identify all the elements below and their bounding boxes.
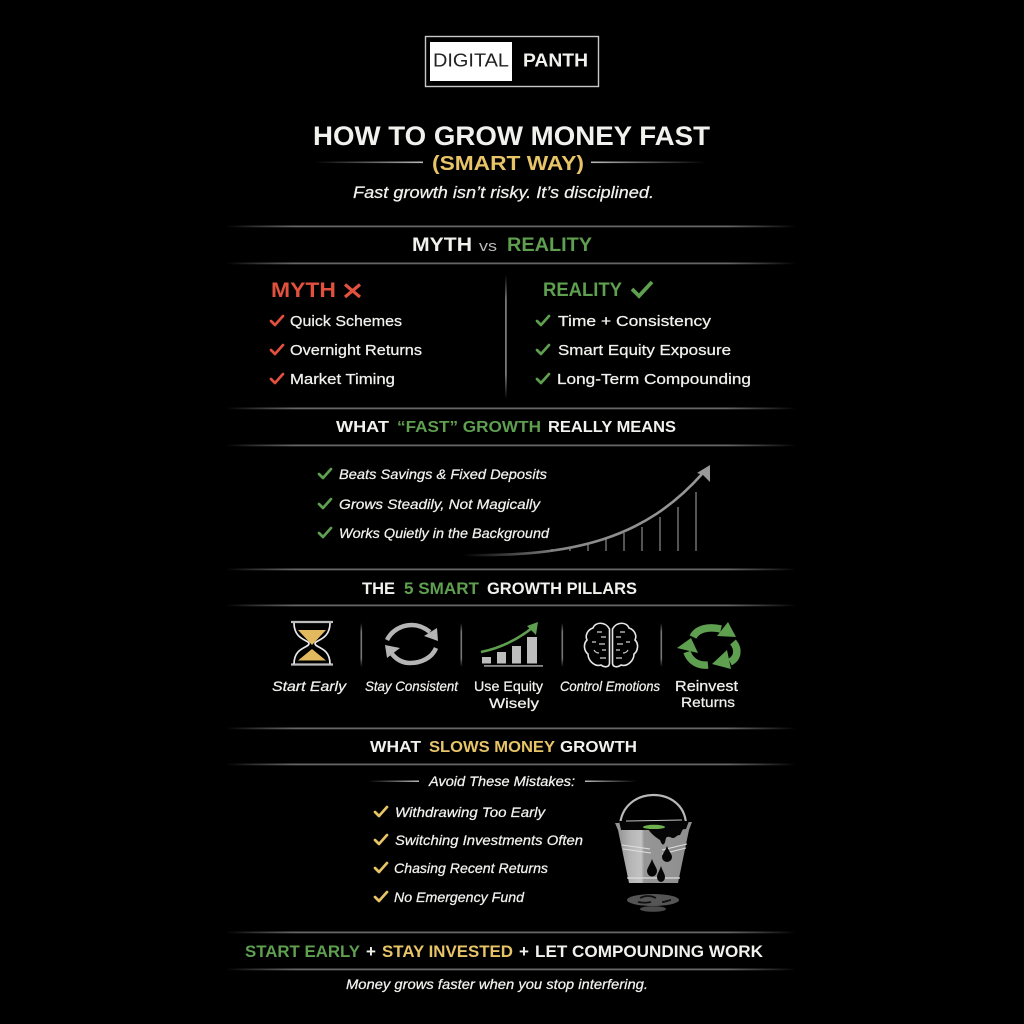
subheading: avoid these mistakes: Avoid These Mistakes: bbox=[428, 774, 575, 789]
reality heading: REALITY bbox=[543, 280, 622, 301]
myth list: Quick Schemes bbox=[290, 313, 402, 330]
pillar: stay consistent: Stay Consistent bbox=[365, 678, 459, 694]
list: mistakes: Chasing Recent Returns bbox=[394, 860, 548, 876]
reality list: Smart Equity Exposure bbox=[558, 342, 731, 359]
list: fast growth meaning: Beats Savings & Fixed Deposits bbox=[339, 466, 547, 482]
tagline: Fast growth isn’t risky. It’s disciplined. bbox=[353, 183, 654, 202]
banner: start early + stay invested + let compounding work: LET COMPOUNDING WORK bbox=[535, 942, 764, 961]
icon: brain bbox=[584, 623, 638, 667]
logo: Digital Panth bbox=[426, 36, 598, 86]
label: use equity wisely: Wisely bbox=[489, 695, 539, 711]
myth list bbox=[271, 313, 422, 388]
reality list: Long-Term Compounding bbox=[557, 371, 751, 388]
logo: Digital Panth: DIGITAL bbox=[433, 50, 509, 70]
heading: myth vs reality: MYTH bbox=[412, 235, 472, 256]
heading: myth vs reality bbox=[412, 235, 592, 256]
heading: what slows money growth bbox=[370, 739, 637, 756]
heading: myth vs reality: REALITY bbox=[507, 235, 592, 256]
title: HOW TO GROW MONEY FAST bbox=[313, 121, 711, 151]
panel: myth column bbox=[271, 279, 422, 388]
panel: reality column bbox=[537, 280, 751, 388]
banner: start early + stay invested + let compounding work: STAY INVESTED bbox=[382, 942, 513, 961]
heading: what fast growth really means: WHAT bbox=[336, 419, 390, 436]
label: reinvest returns: Reinvest bbox=[675, 679, 738, 695]
myth heading: MYTH bbox=[271, 279, 336, 302]
pillar: start early: Start Early bbox=[272, 678, 347, 694]
pillar: start early bbox=[272, 622, 347, 694]
list: mistakes: Withdrawing Too Early bbox=[395, 804, 546, 820]
heading: the 5 smart growth pillars: THE bbox=[362, 580, 395, 598]
heading: the 5 smart growth pillars: GROWTH PILLARS bbox=[487, 580, 637, 598]
list: fast growth meaning: Grows Steadily, Not Magically bbox=[339, 496, 541, 512]
banner: start early + stay invested + let compounding work: + bbox=[366, 942, 376, 961]
label: use equity wisely: Use Equity bbox=[474, 678, 543, 694]
label: reinvest returns: Returns bbox=[681, 694, 735, 710]
banner: start early + stay invested + let compounding work: START EARLY bbox=[245, 942, 361, 961]
icon: green recycle arrows bbox=[677, 622, 737, 669]
list: fast growth meaning: Works Quietly in the Background bbox=[339, 525, 550, 541]
heading: what fast growth really means: “FAST” GROWTH bbox=[397, 419, 541, 436]
banner: start early + stay invested + let compounding work: + bbox=[519, 942, 529, 961]
heading: what slows money growth: GROWTH bbox=[560, 739, 637, 756]
label: use equity wisely bbox=[474, 678, 543, 711]
label: reinvest returns bbox=[675, 679, 738, 710]
pillar: use equity wisely bbox=[474, 622, 543, 711]
panel: pillars bbox=[272, 622, 738, 711]
icon: hourglass bbox=[291, 622, 333, 664]
logo: Digital Panth: PANTH bbox=[523, 50, 588, 70]
list: mistakes: No Emergency Fund bbox=[394, 889, 525, 905]
heading: what fast growth really means: REALLY MEANS bbox=[548, 419, 676, 436]
heading: the 5 smart growth pillars bbox=[362, 580, 637, 598]
heading: myth vs reality: vs bbox=[479, 238, 497, 255]
reality list bbox=[537, 313, 751, 388]
chart: rising growth curve bbox=[463, 465, 710, 555]
heading: the 5 smart growth pillars: 5 SMART bbox=[404, 580, 479, 598]
heading: what slows money growth: WHAT bbox=[370, 739, 421, 756]
icon: leaking bucket bbox=[615, 795, 692, 912]
icon: bars with green arrow bbox=[481, 622, 543, 667]
myth heading bbox=[271, 279, 360, 302]
heading: what slows money growth: SLOWS MONEY bbox=[429, 739, 555, 756]
pillar: control emotions bbox=[560, 623, 660, 694]
banner: start early + stay invested + let compounding work bbox=[245, 942, 764, 961]
list: mistakes bbox=[375, 804, 583, 905]
myth list: Market Timing bbox=[290, 371, 395, 388]
subtitle: smart way: (SMART WAY) bbox=[432, 153, 584, 175]
list: fast growth meaning bbox=[319, 466, 550, 541]
pillar: stay consistent bbox=[365, 625, 459, 694]
myth list: Overnight Returns bbox=[290, 342, 422, 359]
list: mistakes: Switching Investments Often bbox=[395, 832, 583, 848]
heading: what fast growth really means bbox=[336, 419, 676, 436]
icon: refresh arrows bbox=[385, 625, 438, 663]
pillar: reinvest returns bbox=[675, 622, 738, 710]
reality list: Time + Consistency bbox=[558, 313, 712, 330]
closing line: Money grows faster when you stop interfering. bbox=[346, 976, 648, 992]
pillar: control emotions: Control Emotions bbox=[560, 678, 660, 694]
